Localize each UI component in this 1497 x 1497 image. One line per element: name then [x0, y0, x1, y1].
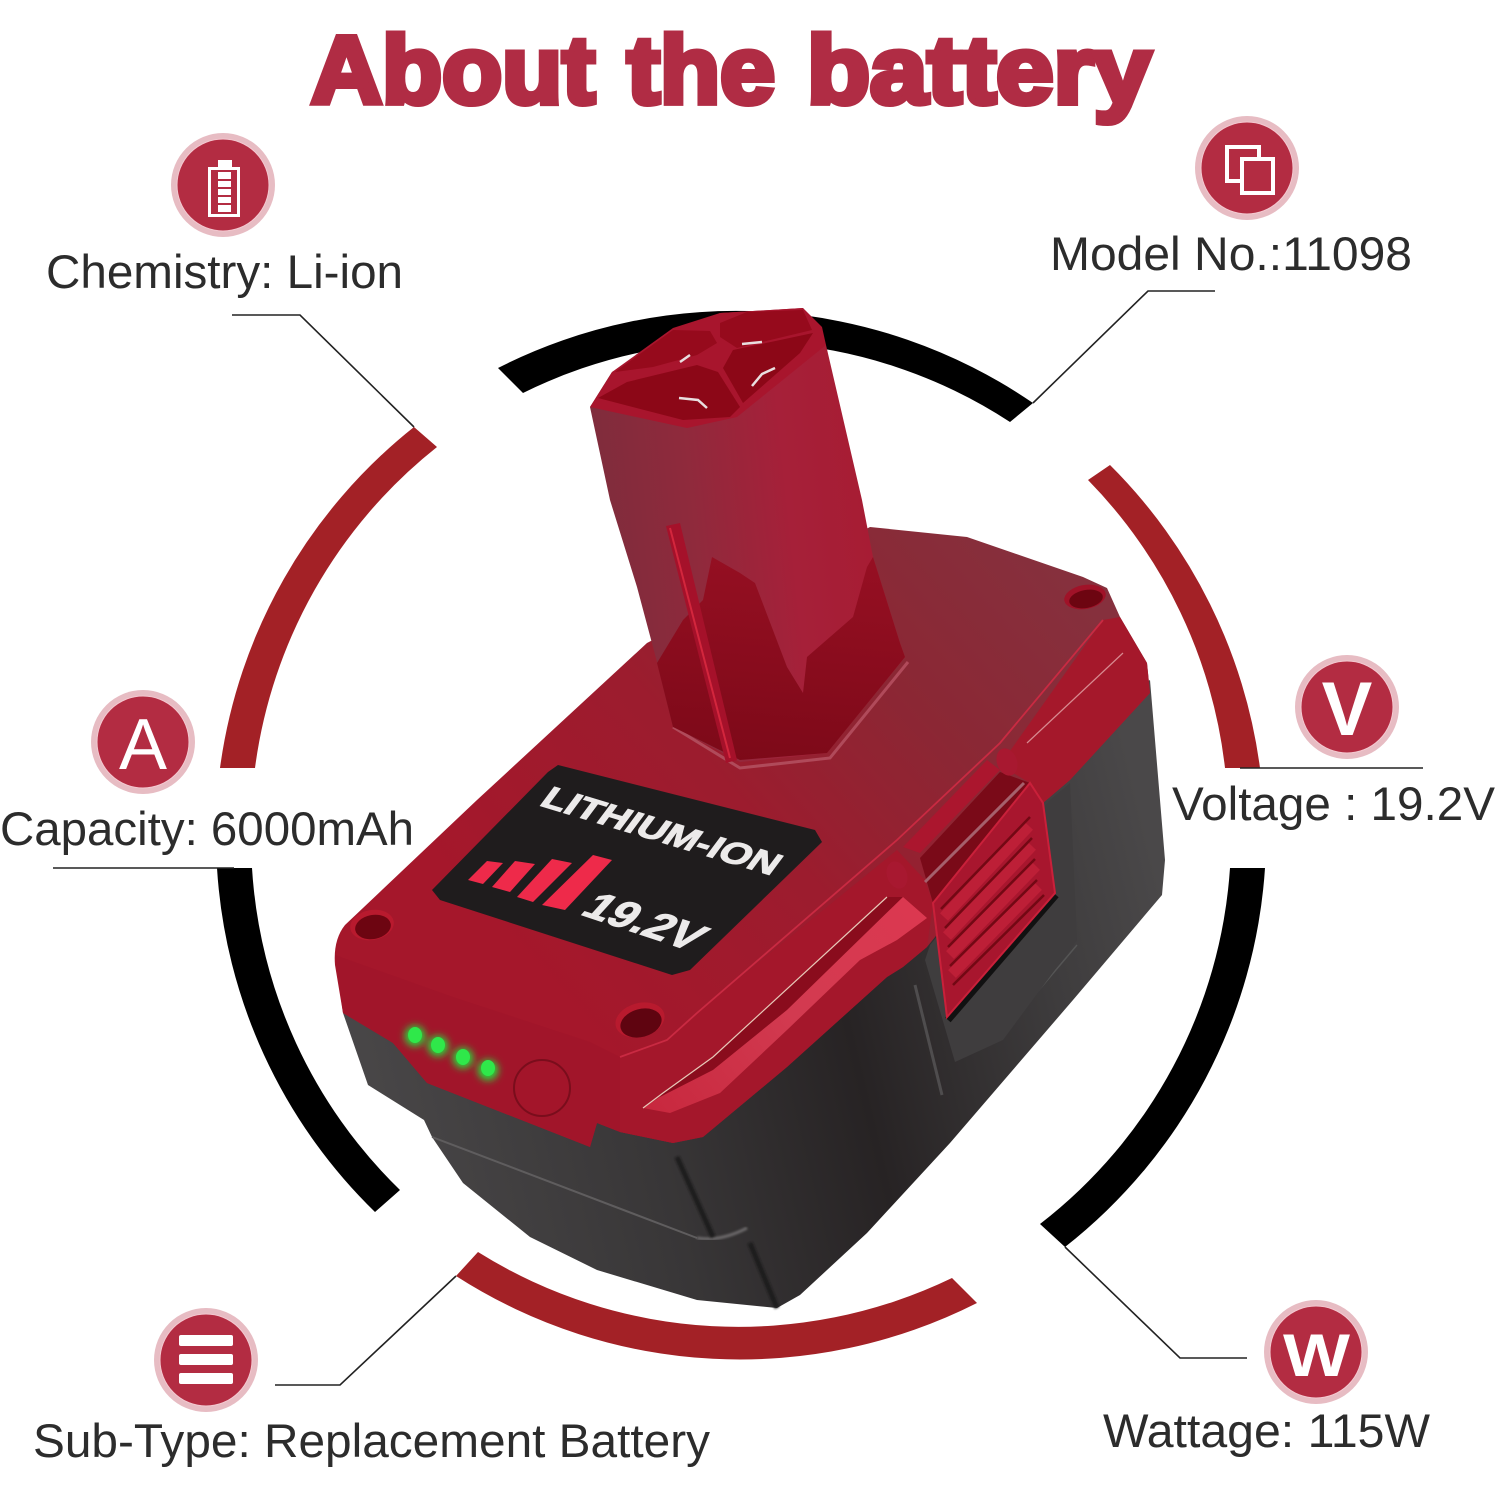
leader lines — [53, 291, 1423, 1385]
label: chemistry: Chemistry: Li-ion — [46, 245, 403, 298]
icon: V: V — [1322, 667, 1373, 752]
battery lower body — [343, 680, 1165, 1308]
ring of arcs — [217, 311, 1265, 1359]
neck base fillet — [673, 662, 908, 768]
title: About — [311, 17, 595, 124]
title — [311, 17, 1151, 124]
battery illustration — [335, 308, 1165, 1308]
pins — [679, 342, 775, 408]
socket back-right — [720, 310, 812, 348]
arc: red left — [220, 427, 437, 768]
arc: black right — [1040, 868, 1265, 1247]
icon: list — [154, 1308, 258, 1412]
label: model number: Model No.:11098 — [1050, 227, 1412, 280]
icon: battery — [171, 133, 275, 237]
icon: copy squares — [1195, 116, 1299, 220]
icon: W: W — [1283, 1322, 1350, 1389]
title: the — [627, 17, 775, 124]
bright strip — [643, 897, 927, 1113]
feature: capacity — [0, 690, 414, 855]
neck ridge — [666, 523, 737, 763]
power button — [514, 1060, 570, 1116]
icon: V — [1295, 655, 1399, 759]
latch clips — [993, 745, 1021, 779]
feature: voltage — [1172, 655, 1496, 830]
label text: lithium-ion: LITHIUM-ION — [533, 781, 789, 882]
screw holes — [348, 582, 1108, 1043]
feature: chemistry — [46, 133, 403, 298]
label: sub-type: Sub-Type: Replacement Battery — [33, 1414, 711, 1467]
shell front face — [335, 955, 673, 1147]
neck dark reflection — [657, 557, 905, 760]
icon: W — [1264, 1300, 1368, 1404]
dark groove — [660, 897, 903, 1097]
feature: sub-type — [33, 1308, 711, 1467]
arc: red right — [1088, 465, 1260, 768]
icon: A — [91, 690, 195, 794]
neck of battery — [590, 308, 908, 768]
LED indicators — [405, 1026, 498, 1080]
battery red shell — [335, 527, 1150, 1147]
label: voltage: Voltage : 19.2V — [1172, 777, 1496, 830]
arc: black left — [217, 868, 400, 1212]
latch — [883, 745, 1077, 1062]
socket right — [723, 333, 813, 403]
shell side band, left — [620, 850, 933, 1143]
label plate — [432, 765, 822, 975]
signal bars — [468, 855, 612, 910]
socket front — [598, 365, 740, 420]
label: wattage: Wattage: 115W — [1103, 1404, 1431, 1457]
label: capacity: Capacity: 6000mAh — [0, 802, 414, 855]
latch bar — [903, 760, 1000, 853]
feature: wattage — [1103, 1300, 1431, 1457]
feature: model number — [1050, 116, 1412, 280]
neck top rim — [590, 308, 826, 428]
title: battery — [807, 17, 1151, 124]
icon: A: A — [119, 705, 167, 785]
arc: black top — [498, 311, 1033, 422]
arc: red bottom — [456, 1252, 977, 1359]
shell side band, right — [1000, 617, 1150, 803]
label text: voltage: 19.2V — [573, 885, 718, 958]
socket back-left — [615, 330, 717, 372]
